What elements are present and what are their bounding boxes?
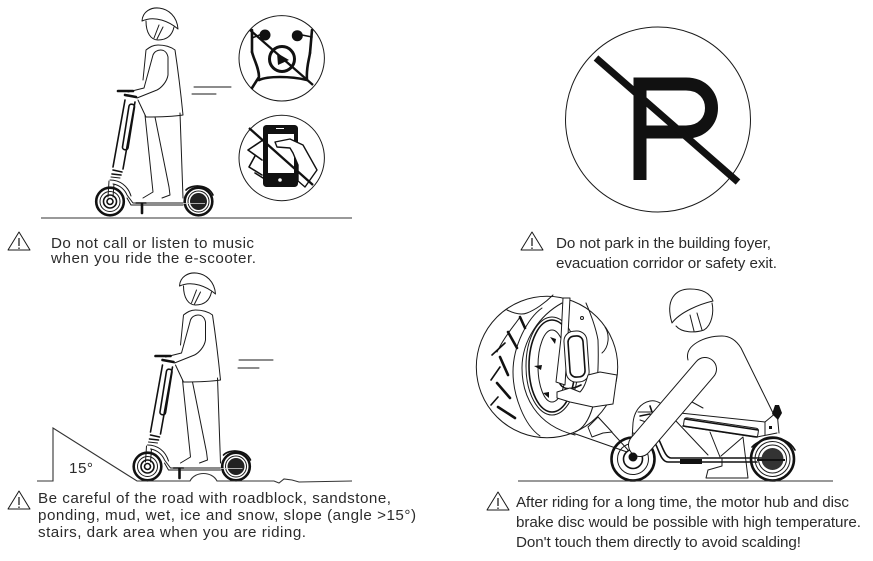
ramp and uneven ground [37,428,352,483]
warning text: parking: Do not park in the building foyer, [556,235,771,252]
rider on scooter [134,273,250,480]
warning text: calls and music: Do not call or listen to music [51,235,254,252]
warning text: road conditions [38,490,416,541]
speed lines [238,360,273,368]
panel: no parking [521,27,777,272]
panel: hot motor hub [476,289,861,551]
ground line [41,217,352,219]
warning text: parking [556,235,777,272]
icon: no earphones [239,16,324,101]
ground line [518,480,833,482]
warning icon [8,491,30,509]
warning text: road conditions: Be careful of the road with roadblock, sandstone, [38,490,391,507]
crouching rider with scooter [612,289,795,480]
pointer lines [570,417,628,452]
warning text: calls and music [50,235,256,267]
warning text: road conditions: stairs, dark area when you are riding. [38,524,306,541]
warning text: hot surfaces: Don't touch them directly to avoid scalding! [516,534,801,551]
icon: no phone [239,115,324,201]
warning icon [487,492,509,510]
warning text: hot surfaces: After riding for a long time, the motor hub and disc [516,494,849,511]
panel: road conditions [8,273,416,541]
warning text: road conditions: ponding, mud, wet, ice and snow, slope (angle >15°) [38,507,416,524]
warning icon [8,232,30,250]
magnified wheel detail [476,295,618,438]
panel: no calls or music [8,8,352,267]
speed lines [192,87,231,94]
warning text: calls and music: when you ride the e-scooter. [50,250,256,267]
warning text: parking: evacuation corridor or safety exit. [556,255,777,272]
slope angle label: 15° [69,460,93,477]
warning icon [521,232,543,250]
rider on scooter [96,8,213,215]
warning text: hot surfaces: brake disc would be possible with high temperature. [516,514,861,531]
warning text: hot surfaces [516,494,861,551]
icon: no parking sign [566,27,750,212]
